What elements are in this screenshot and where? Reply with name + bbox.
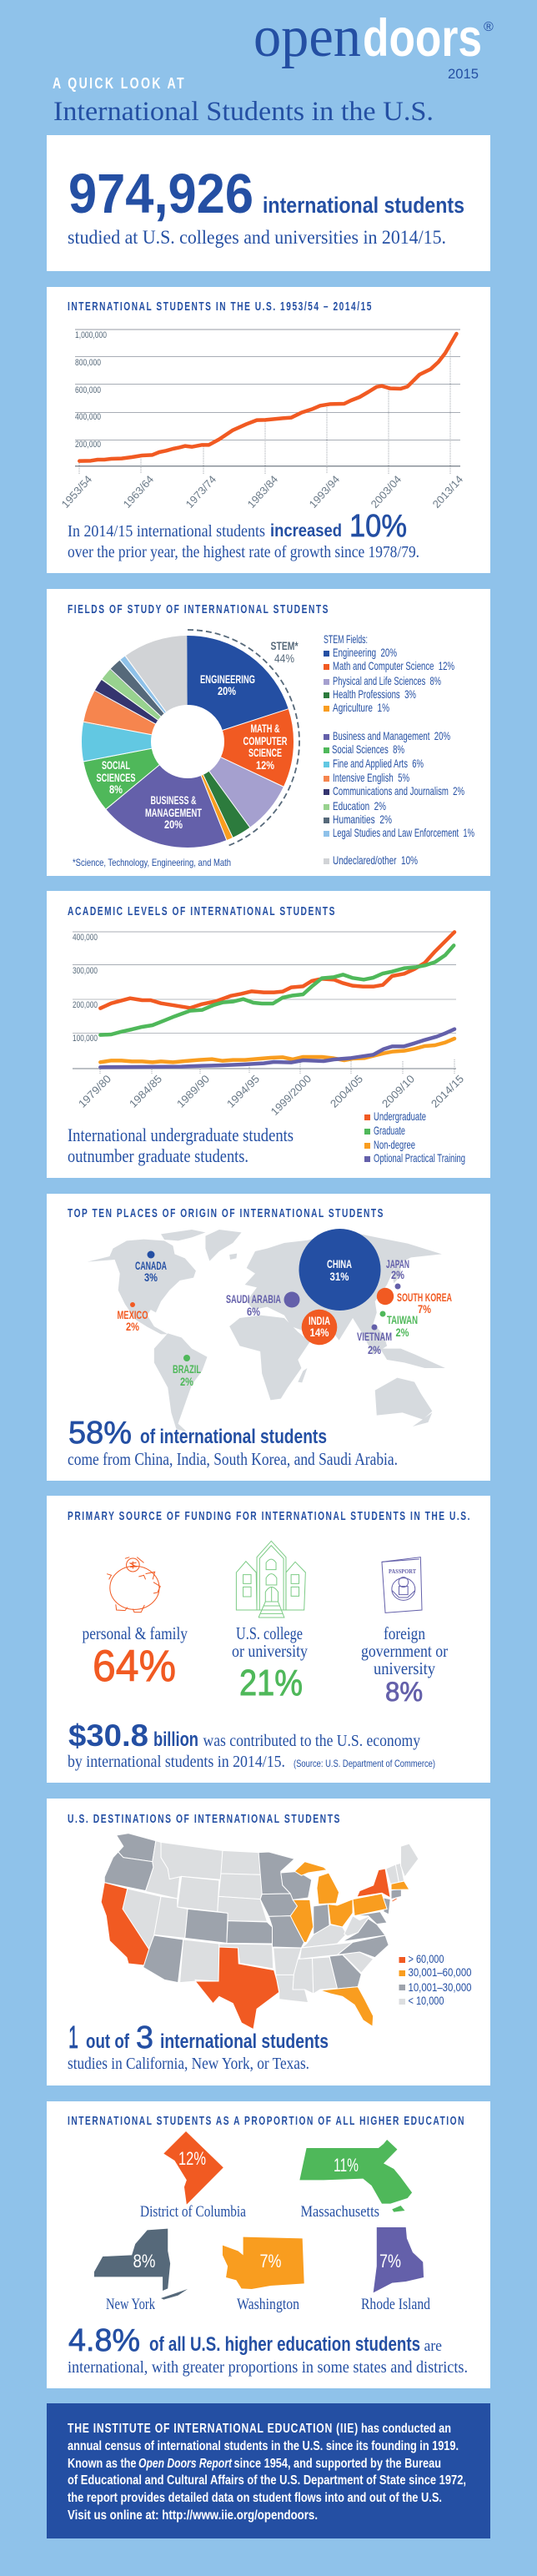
callout: 58 percent: come from China, India, South Korea, and Saudi Arabia. — [68, 1449, 398, 1469]
line chart: students 1953 to 2014: 1973/74 — [183, 473, 218, 511]
stat: personal and family — [82, 1623, 188, 1691]
bubbles: places of origin: 2% — [395, 1326, 409, 1339]
heading: fields of study: FIELDS OF STUDY OF INTERNATIONAL STUDENTS — [68, 603, 329, 616]
bubbles: places of origin: SOUTH KOREA — [397, 1291, 452, 1304]
panel: about IIE: has conducted an — [361, 2422, 451, 2436]
donut chart: fields of study: ENGINEERING — [200, 672, 255, 686]
legend: fields of study: Business and Management 20% — [333, 729, 450, 742]
state: New York: New York — [106, 2296, 155, 2313]
callout: 4.8 percent: are — [424, 2337, 442, 2355]
state: Washington — [223, 2237, 304, 2313]
callout: 10 percent increase — [68, 509, 419, 561]
panel: about IIE — [47, 2403, 490, 2538]
title: International Students in the U.S. — [53, 97, 434, 127]
panel: about IIE: Visit us online at: http://www.iie.org/opendoors. — [68, 2508, 318, 2523]
icon: passport: PASSPORT — [389, 1567, 416, 1575]
legend: fields of study: Health Professions 3% — [333, 687, 416, 701]
stat: college or university: 21% — [239, 1663, 303, 1703]
donut chart: fields of study: STEM* — [270, 639, 299, 652]
legend: student counts: 30,001–60,000 — [409, 1965, 472, 1979]
line chart: academic levels: 400,000 — [73, 933, 98, 943]
callout: one out of three: international students — [160, 2030, 329, 2053]
heading: academic levels: ACADEMIC LEVELS OF INTERNATIONAL STUDENTS — [68, 905, 336, 918]
callout: one out of three: 3 — [136, 2020, 153, 2055]
donut chart: fields of study: COMPUTER — [243, 734, 287, 747]
callout: 4.8 percent: international, with greater proportions in some states and districts. — [68, 2358, 468, 2377]
legend: fields of study: Communications and Journalism 2% — [333, 784, 464, 797]
legend: fields of study: Physical and Life Sciences 8% — [333, 674, 441, 687]
legend: academic levels: Undergraduate — [374, 1109, 426, 1123]
logo: open doors 2015: 2015 — [448, 66, 479, 82]
legend: fields of study: Math and Computer Science 12% — [333, 659, 454, 672]
heading: U.S. destinations: U.S. DESTINATIONS OF INTERNATIONAL STUDENTS — [68, 1813, 341, 1826]
state: Massachusetts: Massachusetts — [300, 2203, 379, 2221]
logo: open doors 2015: open — [253, 5, 361, 69]
callout: undergraduates outnumber graduates: outnumber graduate students. — [68, 1145, 248, 1166]
bubbles: places of origin: CANADA — [135, 1259, 167, 1272]
line chart: academic levels: 300,000 — [73, 966, 98, 976]
panel: total students: 974,926 — [68, 163, 253, 225]
donut chart: fields of study — [83, 630, 299, 846]
panel: enrollment trend — [47, 287, 490, 573]
panel: total students: studied at U.S. colleges and universities in 2014/15. — [68, 227, 446, 248]
line chart: students 1953 to 2014: 2003/04 — [369, 473, 404, 511]
callout: undergraduates outnumber graduates — [68, 1124, 294, 1166]
panel: fields of study — [47, 589, 490, 876]
donut chart: fields of study: BUSINESS & — [150, 793, 197, 807]
footnote: STEM: *Science, Technology, Engineering, and Math — [73, 857, 231, 868]
bubbles: places of origin: TAIWAN — [387, 1313, 418, 1326]
callout: economic contribution: (Source: U.S. Department of Commerce) — [294, 1758, 435, 1769]
panel: places of origin — [47, 1194, 490, 1481]
state: New York: 8% — [133, 2251, 155, 2272]
callout: economic contribution — [68, 1718, 435, 1771]
donut chart: fields of study: 44% — [274, 652, 294, 665]
state: Rhode Island: 7% — [379, 2251, 401, 2272]
stat: personal and family: personal & family — [82, 1623, 188, 1643]
bubbles: places of origin: 14% — [310, 1326, 329, 1339]
stat: foreign government: 8% — [385, 1677, 423, 1707]
panel: about IIE: Open Doors Report — [138, 2457, 233, 2471]
legend: fields of study: Fine and Applied Arts 6% — [333, 757, 424, 770]
line chart: students 1953 to 2014: 1,000,000 — [75, 330, 107, 340]
panel: total students — [47, 135, 490, 271]
donut chart: fields of study: 8% — [109, 782, 123, 796]
bubbles: places of origin: 2% — [368, 1343, 381, 1356]
donut chart: fields of study: SCIENCE — [248, 746, 282, 759]
heading: places of origin: TOP TEN PLACES OF ORIGIN OF INTERNATIONAL STUDENTS — [68, 1207, 384, 1220]
state: Massachusetts — [299, 2140, 412, 2221]
line chart: academic levels: 2009/10 — [379, 1073, 417, 1110]
panel: about IIE: THE INSTITUTE OF INTERNATIONAL EDUCATION (IIE) — [68, 2422, 359, 2436]
bubbles: places of origin: 7% — [418, 1302, 431, 1316]
legend: academic levels — [364, 1109, 465, 1165]
callout: 10 percent increase: over the prior year, the highest rate of growth since 1978/79. — [68, 543, 419, 561]
panel: about IIE: Known as the — [68, 2457, 137, 2471]
logo: open doors 2015: ® — [484, 20, 494, 34]
callout: 4.8 percent: 4.8% — [68, 2323, 140, 2358]
logo: open doors 2015: doors — [363, 9, 482, 68]
line chart: students 1953 to 2014: 1983/84 — [245, 473, 280, 511]
callout: 58 percent: of international students — [140, 1426, 327, 1448]
bubbles: places of origin: 6% — [247, 1305, 260, 1318]
line chart: students 1953 to 2014: 800,000 — [75, 358, 101, 368]
icon: piggy bank — [107, 1557, 160, 1613]
legend: academic levels: Non-degree — [374, 1138, 415, 1151]
callout: one out of three: out of — [86, 2030, 130, 2053]
panel: about IIE: the report provides detailed data on student flows into and out of the U.S. — [68, 2491, 442, 2505]
icon: passport — [382, 1557, 422, 1613]
legend: fields of study: Social Sciences 8% — [332, 742, 404, 756]
panel: total students: international students — [263, 193, 464, 218]
callout: one out of three — [68, 2020, 329, 2073]
stat: foreign government — [361, 1623, 448, 1707]
line chart: students 1953 to 2014: 600,000 — [75, 385, 101, 395]
line chart: students 1953 to 2014: 400,000 — [75, 412, 101, 422]
bubbles: places of origin: MEXICO — [117, 1308, 148, 1321]
panel: U.S. destinations — [47, 1799, 490, 2085]
bubbles: places of origin: 31% — [330, 1270, 349, 1283]
callout: economic contribution: was contributed to the U.S. economy — [203, 1732, 420, 1750]
legend: academic levels: Graduate — [374, 1124, 405, 1137]
world map — [88, 1230, 445, 1431]
state: District of Columbia — [140, 2131, 246, 2221]
line chart: academic levels: 2014/15 — [429, 1073, 466, 1110]
line chart: students 1953 to 2014: 200,000 — [75, 440, 101, 450]
legend: student counts: 10,001–30,000 — [409, 1980, 472, 1994]
callout: 10 percent increase: 10% — [349, 509, 407, 544]
callout: 10 percent increase: In 2014/15 international students — [68, 522, 265, 541]
panel: about IIE: annual census of international students in the U.S. since its founding in 1919. — [68, 2439, 459, 2453]
bubbles: places of origin: VIETNAM — [357, 1330, 392, 1343]
legend: fields of study: Agriculture 1% — [333, 701, 389, 714]
line chart: academic levels — [73, 931, 466, 1118]
callout: 4.8 percent: of all U.S. higher education students — [149, 2333, 420, 2356]
legend: student counts: < 10,000 — [409, 1994, 444, 2007]
line chart: students 1953 to 2014: 1953/54 — [59, 473, 94, 511]
callout: 58 percent: 58% — [68, 1416, 132, 1451]
callout: 58 percent — [68, 1416, 398, 1469]
icon: college building — [236, 1541, 305, 1618]
panel: about IIE: since 1954, and supported by the Bureau — [233, 2457, 441, 2471]
callout: 4.8 percent — [68, 2323, 468, 2377]
legend: fields of study: STEM Fields: — [324, 632, 368, 646]
legend: academic levels: Optional Practical Training — [374, 1151, 465, 1165]
callout: one out of three: 1 — [68, 2020, 78, 2055]
title: A QUICK LOOK AT — [53, 75, 186, 92]
donut chart: fields of study: 20% — [218, 684, 236, 697]
donut chart: fields of study: MATH & — [250, 722, 280, 735]
bubbles: places of origin: 3% — [144, 1270, 158, 1284]
state: Washington: Washington — [237, 2296, 299, 2313]
panel: funding sources — [47, 1496, 490, 1783]
donut chart: fields of study: 12% — [256, 758, 274, 772]
logo: open doors 2015 — [253, 5, 494, 82]
callout: undergraduates outnumber graduates: International undergraduate students — [68, 1124, 294, 1145]
bubbles: places of origin: 2% — [391, 1268, 404, 1281]
legend: fields of study: Engineering 20% — [333, 646, 397, 659]
line chart: students 1953 to 2014: 2013/14 — [430, 473, 465, 511]
callout: economic contribution: by international students in 2014/15. — [68, 1753, 285, 1771]
line chart: students 1953 to 2014: 1963/64 — [121, 473, 156, 511]
legend: fields of study: Undeclared/other 10% — [333, 853, 418, 867]
stat: foreign government: government or — [361, 1641, 448, 1661]
state: Rhode Island — [361, 2227, 430, 2313]
panel: proportion of higher education — [47, 2101, 490, 2388]
stat: college or university: or university — [232, 1641, 308, 1661]
state: Washington: 7% — [260, 2251, 282, 2272]
state: Massachusetts: 11% — [334, 2155, 359, 2176]
state: District of Columbia: 12% — [178, 2148, 206, 2169]
donut chart: fields of study: MANAGEMENT — [145, 806, 202, 819]
panel: about IIE: of Educational and Cultural Affairs of the U.S. Department of State since 1972, — [68, 2473, 466, 2488]
line chart: academic levels: 1989/90 — [174, 1073, 212, 1110]
stat: college or university: U.S. college — [236, 1623, 303, 1643]
line chart: academic levels: 1984/85 — [127, 1073, 164, 1110]
bubbles: places of origin: BRAZIL — [173, 1362, 201, 1376]
callout: economic contribution: billion — [153, 1728, 198, 1751]
map: U.S. states — [101, 1834, 419, 2030]
donut chart: fields of study: 20% — [164, 818, 183, 831]
line chart: academic levels: 200,000 — [73, 1000, 98, 1010]
bubbles: places of origin: 2% — [126, 1320, 139, 1333]
title — [53, 75, 434, 127]
callout: economic contribution: $30.8 — [68, 1718, 148, 1753]
line chart: academic levels: 1979/80 — [76, 1073, 113, 1110]
state: District of Columbia: District of Columbia — [140, 2203, 246, 2221]
legend: student counts: > 60,000 — [409, 1952, 444, 1965]
stat: foreign government: university — [374, 1658, 435, 1678]
legend: fields of study: Intensive English 5% — [333, 771, 409, 784]
legend: fields of study: Humanities 2% — [333, 813, 392, 826]
bubbles: places of origin: JAPAN — [386, 1257, 409, 1270]
bubbles: places of origin: SAUDI ARABIA — [226, 1292, 281, 1306]
donut chart: fields of study: SCIENCES — [97, 771, 135, 784]
line chart: academic levels: 100,000 — [73, 1034, 98, 1044]
bubbles: places of origin: INDIA — [309, 1314, 330, 1327]
callout: 10 percent increase: increased — [270, 521, 342, 541]
donut chart: fields of study: SOCIAL — [102, 758, 130, 772]
line chart: academic levels: 2004/05 — [328, 1073, 365, 1110]
bubbles: places of origin — [117, 1229, 452, 1388]
bubbles: places of origin: CHINA — [327, 1257, 352, 1270]
callout: one out of three: studies in California, New York, or Texas. — [68, 2055, 309, 2073]
state: Rhode Island: Rhode Island — [361, 2296, 430, 2313]
line chart: academic levels: 1994/95 — [224, 1073, 262, 1110]
stat: foreign government: foreign — [384, 1623, 425, 1643]
panel: academic levels — [47, 891, 490, 1178]
legend: student counts — [399, 1952, 472, 2007]
heading: enrollment trend: INTERNATIONAL STUDENTS IN THE U.S. 1953/54 – 2014/15 — [68, 300, 373, 314]
legend: fields of study — [324, 632, 474, 867]
bubbles: places of origin: 2% — [180, 1375, 193, 1388]
state: New York — [94, 2229, 188, 2313]
legend: fields of study: Education 2% — [333, 799, 386, 813]
line chart: students 1953 to 2014: 1993/94 — [307, 473, 342, 511]
line chart: students 1953 to 2014 — [59, 329, 465, 511]
stat: personal and family: 64% — [93, 1642, 176, 1691]
stat: college or university — [232, 1623, 308, 1703]
line chart: academic levels: 1999/2000 — [268, 1073, 314, 1118]
